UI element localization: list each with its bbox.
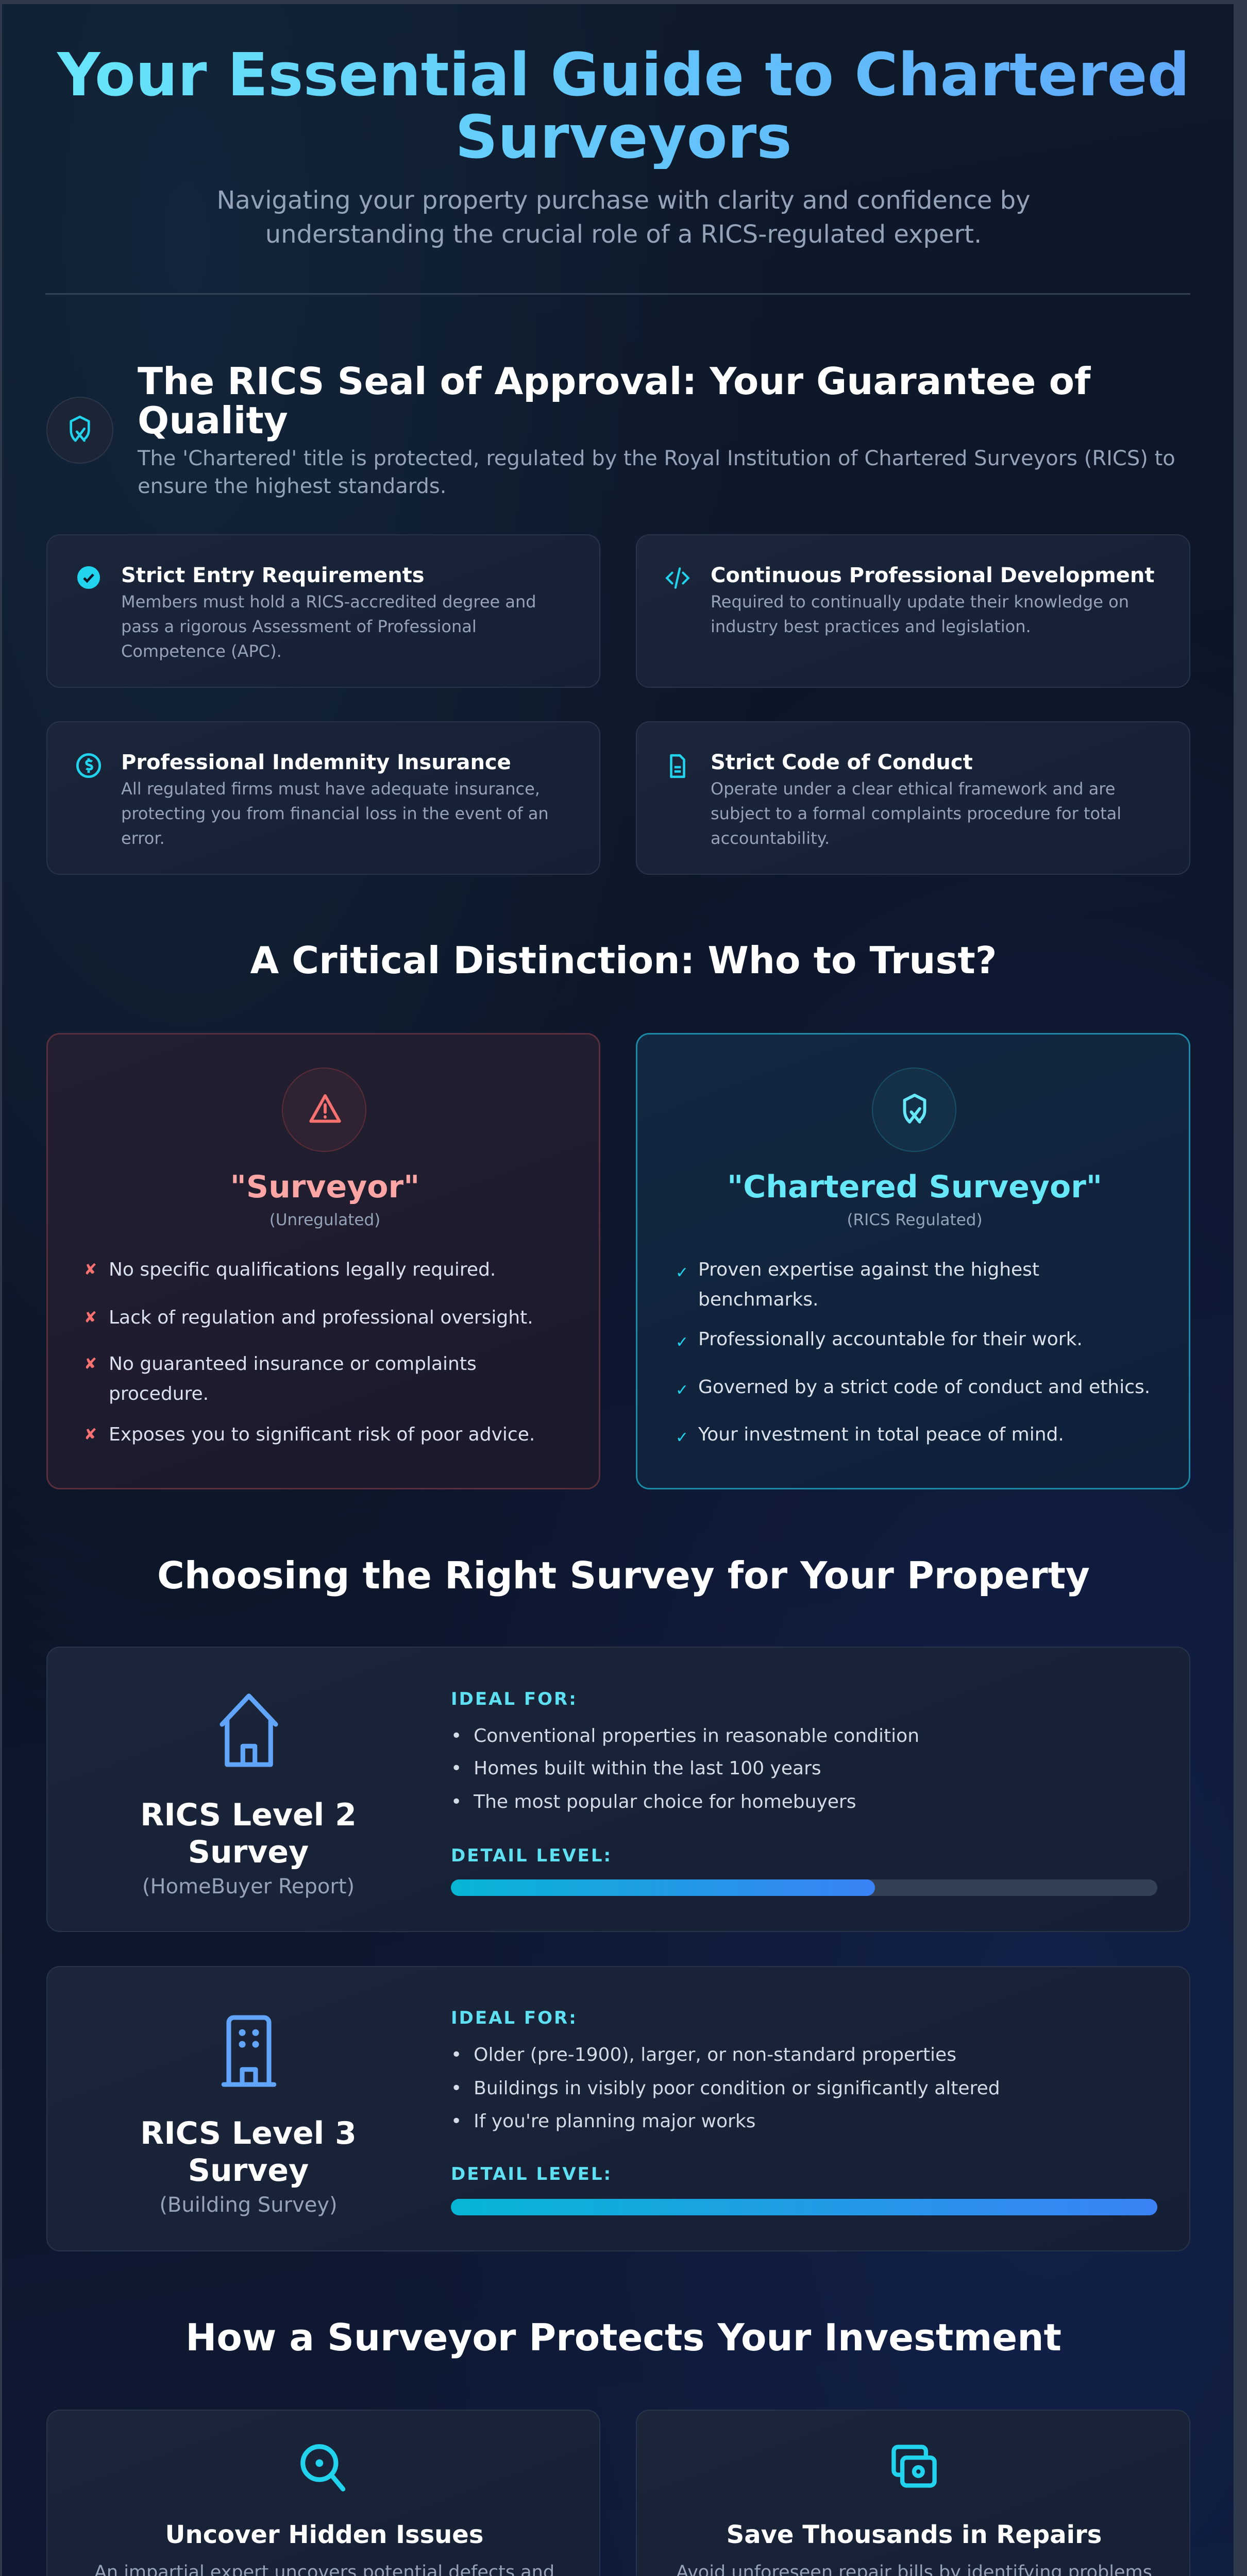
card: code of conduct: Strict Code of Conduct [711,751,973,774]
list: benefits: Governed by a strict code of conduct and ethics. [698,1377,1150,1398]
card: code of conduct: accountability. [711,828,830,848]
panel: level 3 survey: Survey [188,2153,309,2189]
panel: level 2 survey: Survey [188,1834,309,1870]
card: CPD: industry best practices and legislation. [711,617,1031,636]
heading: choosing survey: Choosing the Right Survey for Your Property [157,1554,1090,1597]
list: benefits: ✓ [676,1429,688,1447]
card: CPD: Continuous Professional Development [711,564,1155,587]
list: benefits: ✓ [676,1264,688,1282]
description: ensure the highest standards. [138,474,446,498]
panel: level 2 survey: • The most popular choice for homebuyers [451,1791,856,1812]
title [0,44,1247,169]
card: indemnity: All regulated firms must have adequate insurance, [121,779,540,799]
list: benefits: Proven expertise against the highest [698,1259,1039,1280]
detail level bar: DETAIL LEVEL: [451,1845,612,1866]
detail level bar: DETAIL LEVEL: [451,2164,612,2184]
list: risks: ✘ [84,1355,97,1373]
ideal for list: IDEAL FOR: [451,1689,578,1709]
subtitle: Navigating your property purchase with clarity and confidence by [216,186,1031,215]
title: Surveyors [455,103,792,172]
card: CPD: Required to continually update their knowledge on [711,592,1129,612]
card: CPD [636,534,1190,688]
panel: level 2 survey: RICS Level 2 [140,1797,357,1833]
icon: building [222,2015,276,2087]
card: strict entry [46,534,600,688]
panel: level 3 survey: • If you're planning major works [451,2111,755,2132]
heading: protects investment: How a Surveyor Protects Your Investment [186,2316,1061,2359]
card: uncover: Uncover Hidden Issues [165,2520,483,2549]
card: code of conduct: subject to a formal complaints procedure for total [711,804,1121,823]
panel: level 2 survey: • Conventional properties in reasonable condition [451,1725,919,1747]
description: The 'Chartered' title is protected, regulated by the Royal Institution of Chartered Surveyors (RICS) to [138,447,1175,470]
panel: chartered surveyor: (RICS Regulated) [847,1211,983,1229]
label: "Surveyor" [230,1169,419,1205]
panel: surveyor (unregulated): (Unregulated) [269,1211,380,1229]
panel: level 2 survey [46,1647,1190,1932]
heading: critical distinction: A Critical Distinction: Who to Trust? [250,939,997,982]
panel: level 3 survey: • Older (pre-1900), larger, or non-standard properties [451,2044,956,2065]
list: risks [84,1259,535,1445]
icon: shield [872,1067,956,1152]
panel: level 3 survey: RICS Level 3 [140,2115,357,2151]
list: risks: ✘ [84,1309,97,1327]
panel: level 3 survey: • Buildings in visibly poor condition or significantly altered [451,2078,1000,2099]
card: strict entry: pass a rigorous Assessment of Professional [121,617,477,636]
card: code of conduct: Operate under a clear ethical framework and are [711,779,1115,799]
list: risks: procedure. [109,1383,209,1404]
label: "Chartered Surveyor" [727,1169,1102,1205]
card: indemnity: protecting you from financial loss in the event of an [121,804,549,823]
list: risks: ✘ [84,1261,97,1279]
card: code of conduct [636,721,1190,875]
icon: search [300,2444,345,2492]
list: risks: No specific qualifications legally required. [109,1259,496,1280]
list: benefits: Professionally accountable for their work. [698,1329,1083,1350]
subtitle [216,186,1031,249]
card: strict entry: Competence (APC). [121,641,282,661]
card: strict entry: Members must hold a RICS-accredited degree and [121,592,536,612]
list: benefits [676,1259,1150,1447]
heading text: Quality [138,399,288,442]
list: benefits: benchmarks. [698,1289,818,1310]
list: risks: No guaranteed insurance or complaints [109,1353,477,1375]
icon: badge check [77,566,100,589]
title: Your Essential Guide to Chartered [57,41,1190,110]
panel: chartered surveyor [636,1033,1190,1489]
icon: shield [46,397,113,464]
section: RICS seal heading [46,360,1175,498]
card: strict entry: Strict Entry Requirements [121,564,425,587]
icon: coin [76,753,101,778]
list: risks: Lack of regulation and professional oversight. [109,1307,533,1328]
panel: level 3 survey: (Building Survey) [159,2193,338,2217]
icon: document [670,754,685,778]
panel: surveyor (unregulated) [46,1033,600,1489]
heading text [138,360,1091,442]
card: indemnity: Professional Indemnity Insurance [121,751,511,774]
list: benefits: ✓ [676,1381,688,1399]
panel: level 3 survey [46,1966,1190,2251]
ideal for list: IDEAL FOR: [451,2008,578,2028]
list: benefits: ✓ [676,1333,688,1351]
description [137,447,1175,498]
card: uncover [46,2410,600,2576]
icon: money [891,2445,937,2488]
icon: code [665,567,690,589]
panel: level 2 survey: • Homes built within the last 100 years [451,1758,821,1779]
icon: house [220,1693,278,1767]
card: save thousands: Save Thousands in Repairs [727,2520,1102,2549]
card: indemnity: error. [121,828,165,848]
list: risks: Exposes you to significant risk of poor advice. [109,1424,535,1445]
list: benefits: Your investment in total peace of mind. [698,1424,1064,1445]
card: save thousands [636,2410,1190,2576]
subtitle: understanding the crucial role of a RICS-regulated expert. [265,220,982,249]
list: risks: ✘ [84,1426,97,1444]
heading text: The RICS Seal of Approval: Your Guarantee of [138,360,1090,403]
card: indemnity [46,721,600,875]
panel: level 2 survey: (HomeBuyer Report) [142,1875,355,1899]
icon: warning [282,1067,366,1152]
